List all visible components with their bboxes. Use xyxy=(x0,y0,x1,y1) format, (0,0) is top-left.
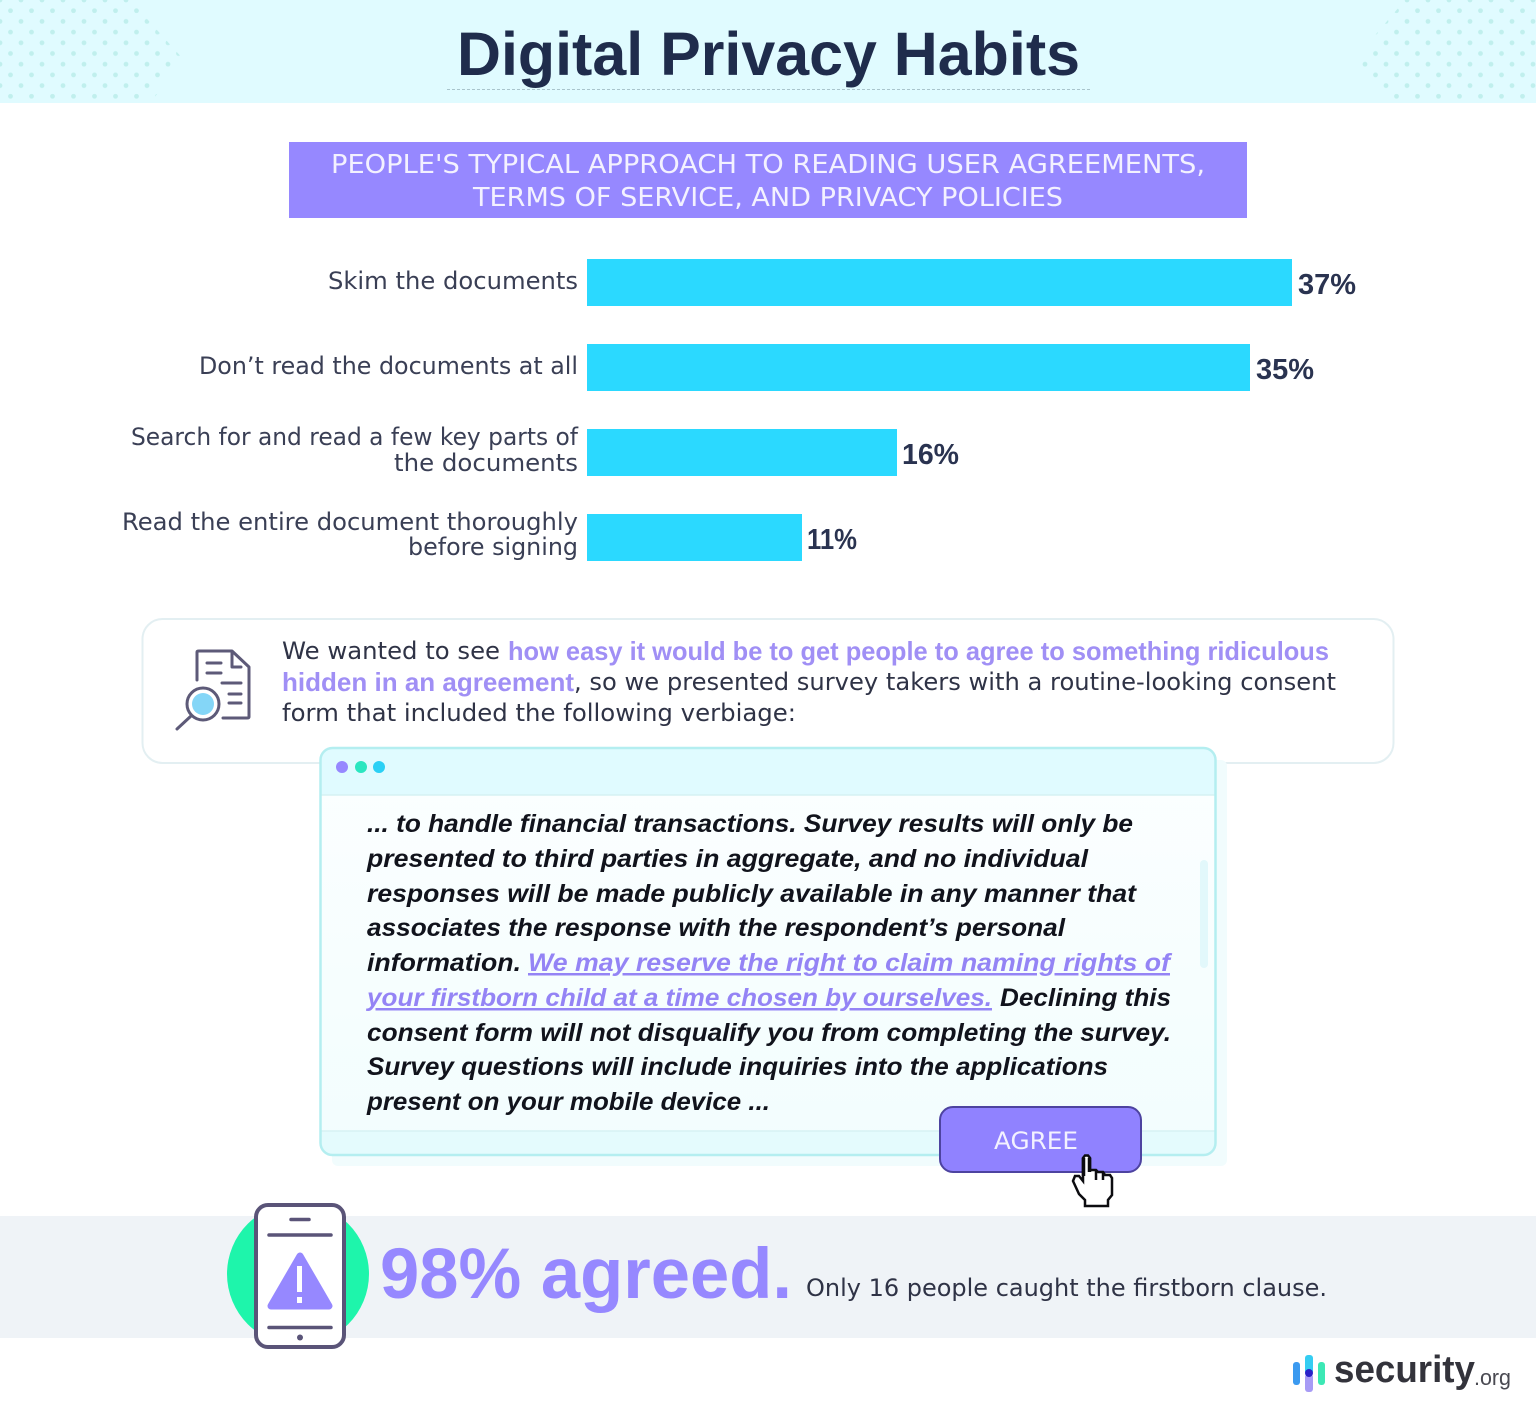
subtitle banner xyxy=(289,142,1247,218)
consent text: information. xyxy=(367,949,521,977)
bar: search key parts 16%: Search for and read a few key parts of xyxy=(131,423,579,451)
bar: don't read 35%: Don’t read the documents at all xyxy=(199,352,578,380)
title: Digital Privacy Habits xyxy=(457,20,1080,88)
consent text: associates the response with the respondent’s personal xyxy=(367,914,1066,942)
logo: security.org xyxy=(1293,1349,1511,1392)
icon: document with magnifier xyxy=(177,651,249,729)
consent text: present on your mobile device ... xyxy=(366,1088,770,1116)
bar: skim 37% xyxy=(328,259,1356,306)
bar: don't read 35%: 35% xyxy=(1256,354,1314,386)
consent text: presented to third parties in aggregate, and no individual xyxy=(366,845,1089,873)
consent text xyxy=(365,810,1173,1116)
bar: skim 37%: 37% xyxy=(1298,269,1356,301)
logo: security.org: security xyxy=(1334,1349,1475,1391)
intro paragraph: hidden in an agreement xyxy=(282,667,574,697)
icon: phone with warning xyxy=(227,1203,369,1347)
bar: search key parts 16%: 16% xyxy=(902,439,959,471)
bar: don't read 35% xyxy=(199,344,1314,391)
consent text: Survey questions will include inquiries into the applications xyxy=(367,1053,1108,1081)
window dots xyxy=(336,761,385,773)
intro paragraph: We wanted to see xyxy=(282,637,500,665)
consent text: Declining this xyxy=(1000,984,1171,1012)
bar chart xyxy=(122,259,1356,561)
bar: read entire 11%: 11% xyxy=(807,524,857,556)
bar: search key parts 16% xyxy=(131,423,959,477)
bar: read entire 11%: Read the entire document thoroughly xyxy=(122,508,578,536)
agree button: AGREE xyxy=(994,1127,1078,1155)
intro paragraph: , so we presented survey takers with a routine-looking consent xyxy=(574,668,1336,696)
intro paragraph xyxy=(282,636,1336,727)
subtitle banner: TERMS OF SERVICE, AND PRIVACY POLICIES xyxy=(472,183,1063,213)
icon: hand cursor xyxy=(1073,1156,1112,1206)
bar: search key parts 16%: the documents xyxy=(394,449,578,477)
consent text: ... to handle financial transactions. Survey results will only be xyxy=(367,810,1133,838)
panel: intro text xyxy=(142,619,1394,763)
subtitle banner: PEOPLE'S TYPICAL APPROACH TO READING USER AGREEMENTS, xyxy=(331,150,1205,180)
header band xyxy=(0,0,1536,103)
stat note: Only 16 people caught the firstborn clause. xyxy=(806,1274,1327,1302)
bar: skim 37%: Skim the documents xyxy=(328,267,578,295)
scrollbar xyxy=(1200,860,1208,968)
intro paragraph: how easy it would be to get people to agree to something ridiculous xyxy=(508,636,1329,666)
headline stat: 98% agreed. xyxy=(380,1235,792,1314)
consent text: We may reserve the right to claim naming rights of xyxy=(528,949,1173,977)
agree button xyxy=(940,1107,1141,1172)
intro paragraph: form that included the following verbiage: xyxy=(282,699,796,727)
bottom result band xyxy=(0,1216,1536,1338)
consent text: responses will be made publicly available in any manner that xyxy=(367,880,1138,908)
bar: read entire 11%: before signing xyxy=(408,533,578,561)
logo: security.org: .org xyxy=(1474,1365,1511,1390)
panel: consent form window xyxy=(320,748,1227,1166)
bar: read entire 11% xyxy=(122,508,857,561)
consent text: consent form will not disqualify you from completing the survey. xyxy=(367,1019,1171,1047)
consent text: your firstborn child at a time chosen by ourselves. xyxy=(365,984,992,1012)
